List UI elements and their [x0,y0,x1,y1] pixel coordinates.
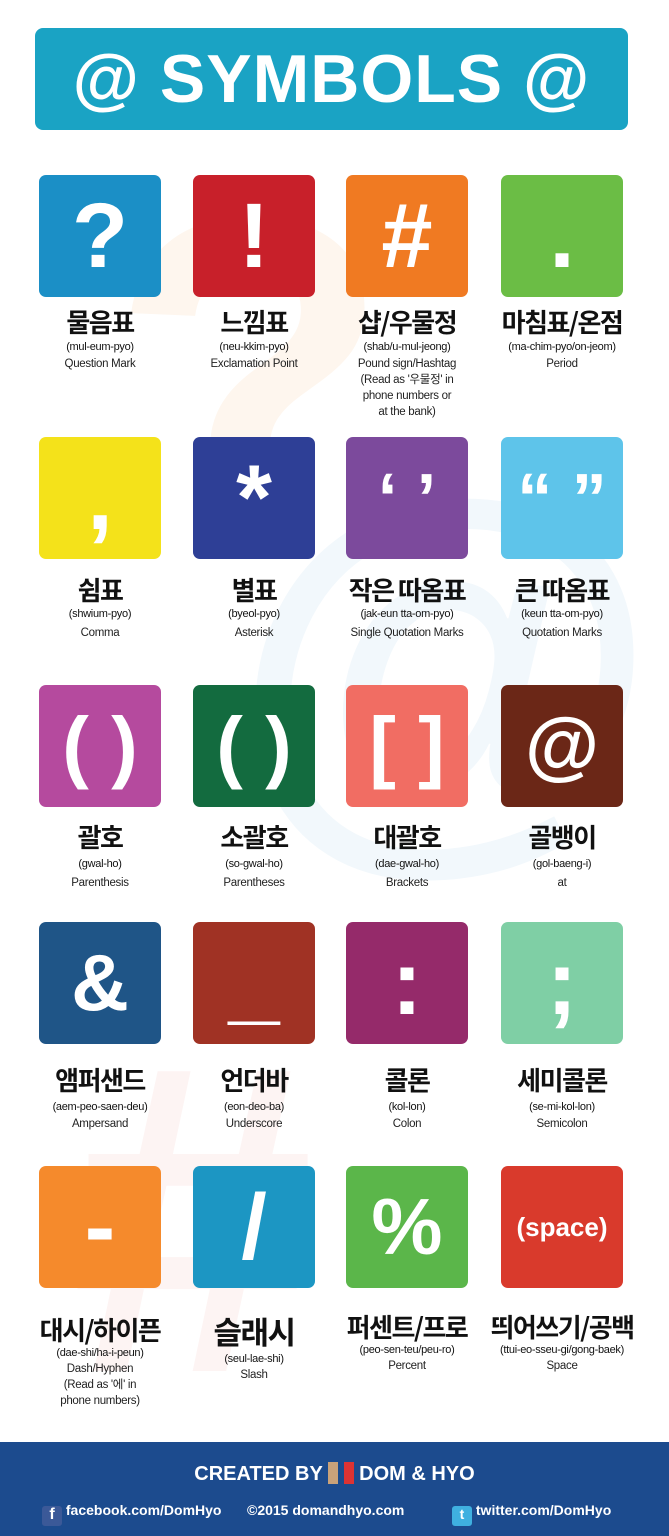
tile: percent [346,1166,468,1288]
tile: exclamation: ! [239,185,269,287]
label: space: 띄어쓰기/공백 [490,1308,634,1345]
tile: underscore: _ [228,932,280,1034]
label: parentheses: 소괄호 [220,818,288,855]
tile: parenthesis [39,685,161,807]
label: double quotes: 큰 따옴표 [515,571,609,608]
label: hash: 샵/우물정 [358,303,456,340]
label: underscore: 언더바 [220,1061,288,1098]
label: hash: at the bank) [378,406,436,418]
tile: question mark: ? [72,185,128,287]
footer [0,1442,669,1536]
tile: parentheses: ( ) [216,701,292,790]
label: dash: (Read as '에' in [64,1379,136,1391]
label: asterisk [228,571,280,639]
label: parentheses: Parentheses [223,877,285,889]
label: semicolon [517,1061,608,1130]
tile: comma: , [87,447,113,549]
row 2 [39,437,623,559]
label: asterisk: (byeol-pyo) [228,608,280,620]
label: period: 마침표/온점 [502,303,622,340]
label: colon: 콜론 [385,1061,429,1098]
tile: question mark [39,175,161,297]
row 1 [39,175,623,297]
tile: period [501,175,623,297]
tile: ampersand: & [71,938,129,1027]
title banner: @ SYMBOLS @ [73,41,590,117]
label: brackets: (dae-gwal-ho) [375,858,439,870]
label: parenthesis: Parenthesis [71,877,129,889]
label: parenthesis [71,818,129,889]
footer links: ©2015 domandhyo.com [247,1502,404,1518]
label: comma [69,571,131,639]
label: double quotes [515,571,610,639]
tile: asterisk: * [236,447,272,549]
title banner [35,28,628,130]
label: at [528,818,596,889]
label: dash: 대시/하이픈 [40,1311,160,1348]
label: percent: Percent [388,1360,426,1372]
label: single quotes: 작은 따옴표 [349,571,465,608]
label: question mark: 물음표 [66,303,134,340]
tile: period: . [549,185,575,287]
label: underscore: Underscore [226,1118,282,1130]
label: parenthesis: (gwal-ho) [78,858,122,870]
tile: colon: : [392,932,422,1034]
label: slash: Slash [240,1369,268,1381]
tile: slash [193,1166,315,1288]
tile: single quotes [346,437,468,559]
background faint symbols: @ [230,414,659,905]
label: slash: (seul-lae-shi) [224,1353,284,1365]
label: period: Period [546,358,578,370]
tile: asterisk [193,437,315,559]
label: asterisk: 별표 [232,571,276,608]
tile: underscore [193,922,315,1044]
tile: at: @ [525,703,599,788]
tile: dash [39,1166,161,1288]
label: single quotes: (jak-eun tta-om-pyo) [360,608,454,620]
tile: dash: - [85,1176,115,1278]
label: hash: phone numbers or [363,390,451,402]
tile: double quotes [501,437,623,559]
label: semicolon: Semicolon [536,1118,588,1130]
label: colon [385,1061,430,1130]
label: dash: (dae-shi/ha-i-peun) [56,1347,144,1359]
label: hash [358,303,456,418]
label: question mark [65,303,136,370]
background faint symbols: ? [110,123,391,636]
footer links: facebook.com/DomHyo [66,1502,221,1518]
label: single quotes [349,571,466,639]
label: dash: phone numbers) [60,1395,140,1407]
label: ampersand: Ampersand [72,1118,128,1130]
label: question mark: (mul-eum-pyo) [66,341,134,353]
label: space: (ttui-eo-sseu-gi/gong-baek) [500,1344,624,1356]
label: parentheses [220,818,288,889]
label: percent: 퍼센트/프로 [347,1308,467,1345]
label: exclamation: (neu-kkim-pyo) [219,341,289,353]
tile: brackets [346,685,468,807]
label: slash [213,1308,295,1381]
label: hash: Pound sign/Hashtag [358,358,456,370]
footer links: t [460,1506,464,1522]
label: underscore [220,1061,289,1130]
label: at: (gol-baeng-i) [533,858,591,870]
label: parentheses: (so-gwal-ho) [225,858,283,870]
label: asterisk: Asterisk [235,627,273,639]
tile: exclamation [193,175,315,297]
label: brackets: 대괄호 [373,818,441,855]
tile: ampersand [39,922,161,1044]
label: dash [40,1311,161,1407]
footer credit: CREATED BY DOM & HYO [194,1463,475,1485]
tile: slash: / [241,1176,267,1278]
label: exclamation: 느낌표 [220,303,288,340]
label: percent [347,1308,468,1372]
tile: semicolon: ; [547,932,577,1034]
tile: at [501,685,623,807]
row 3 [39,685,623,807]
footer links: twitter.com/DomHyo [476,1502,611,1518]
tile: double quotes: “ ” [517,459,607,537]
label: space [490,1308,634,1372]
label: colon: (kol-lon) [388,1101,426,1113]
label: underscore: (eon-deo-ba) [224,1101,284,1113]
label: comma: Comma [81,627,119,639]
label: hash: (Read as '우물정' in [360,374,454,386]
tile: semicolon [501,922,623,1044]
label: percent: (peo-sen-teu/peu-ro) [360,1344,454,1356]
label: ampersand: 앰퍼샌드 [55,1061,145,1098]
row 4 [39,922,623,1044]
tile: single quotes: ‘ ’ [378,459,436,537]
label: at: 골뱅이 [528,818,596,855]
label: space: Space [546,1360,578,1372]
label: parenthesis: 괄호 [78,818,122,855]
label: colon: Colon [393,1118,421,1130]
tile: colon [346,922,468,1044]
label: comma: 쉼표 [78,571,122,608]
label: comma: (shwium-pyo) [69,608,131,620]
label: exclamation: Exclamation Point [211,358,297,370]
label: dash: Dash/Hyphen [67,1363,133,1375]
tile: hash: # [381,185,433,287]
tile: parenthesis: ( ) [62,701,138,790]
label: ampersand: (aem-peo-saen-deu) [53,1101,147,1113]
tile: parentheses [193,685,315,807]
tile: space [501,1166,623,1288]
label: slash: 슬래시 [213,1308,295,1353]
label: period [502,303,622,370]
label: brackets [373,818,442,889]
label: brackets: Brackets [386,877,428,889]
tile: comma [39,437,161,559]
label: ampersand [53,1061,148,1130]
tile: space: (space) [516,1212,608,1242]
label: semicolon: (se-mi-kol-lon) [529,1101,595,1113]
label: semicolon: 세미콜론 [517,1061,607,1098]
tile: brackets: [ ] [369,701,445,790]
label: period: (ma-chim-pyo/on-jeom) [508,341,616,353]
row 5 [39,1166,623,1288]
label: at: at [558,877,566,889]
footer links: f [49,1506,55,1523]
tile: hash [346,175,468,297]
footer links [42,1502,611,1526]
label: single quotes: Single Quotation Marks [351,627,463,639]
label: double quotes: Quotation Marks [522,627,602,639]
tile: percent: % [371,1182,443,1271]
label: hash: (shab/u-mul-jeong) [364,341,450,353]
label: double quotes: (keun tta-om-pyo) [521,608,603,620]
label: question mark: Question Mark [65,358,135,370]
label: exclamation [211,303,298,370]
